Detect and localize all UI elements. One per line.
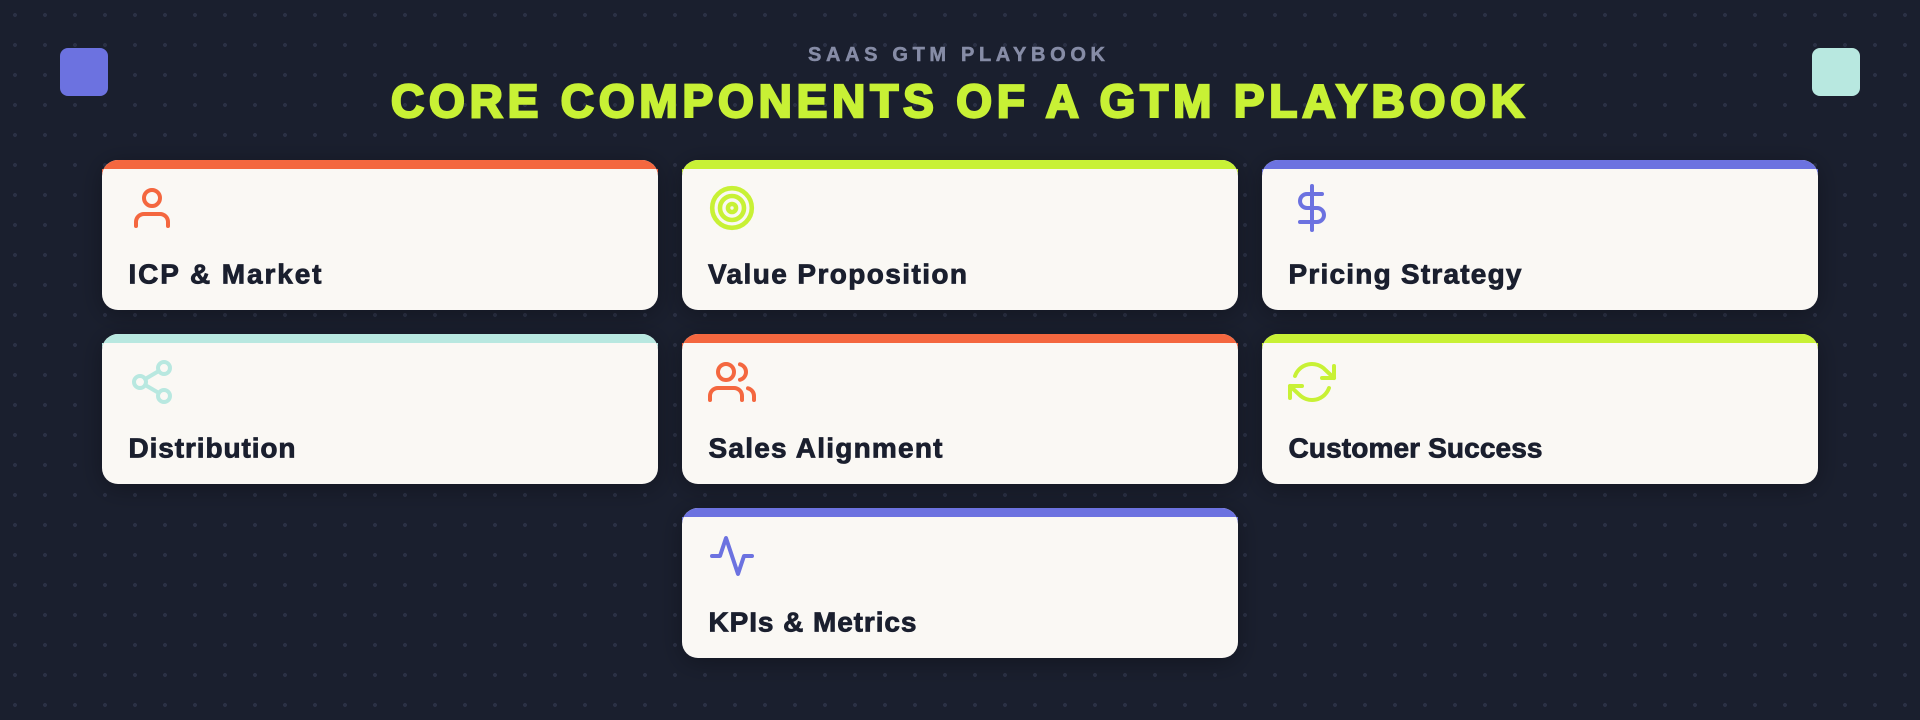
icon: share — [134, 362, 170, 402]
decorative square: purple — [60, 48, 108, 96]
icon: dollar — [1300, 186, 1324, 230]
panel: Sales Alignment — [682, 334, 1238, 484]
panel: ICP & Market — [102, 160, 658, 310]
panel: KPIs & Metrics — [682, 508, 1238, 658]
icon: person — [136, 190, 168, 226]
icon: users — [710, 364, 754, 400]
label: Sales Alignment: Sales Alignment — [708, 432, 942, 464]
panel: Distribution — [102, 334, 658, 484]
label: Customer Success: Customer Success — [1288, 432, 1542, 464]
panel: Customer Success — [1262, 334, 1818, 484]
icon: target — [712, 188, 752, 228]
icon: refresh — [1290, 364, 1334, 400]
label: Distribution: Distribution — [128, 432, 296, 464]
label: Pricing Strategy: Pricing Strategy — [1288, 258, 1522, 290]
panel: Pricing Strategy — [1262, 160, 1818, 310]
title: CORE COMPONENTS OF A GTM PLAYBOOK — [391, 75, 1524, 127]
label: Value Proposition: Value Proposition — [708, 258, 967, 290]
label: ICP & Market: ICP & Market — [128, 258, 322, 290]
panel: Value Proposition — [682, 160, 1238, 310]
subtitle: SAAS GTM PLAYBOOK — [808, 44, 1106, 66]
decorative square: mint — [1812, 48, 1860, 96]
label: KPIs & Metrics: KPIs & Metrics — [708, 606, 916, 638]
icon: activity — [712, 538, 752, 574]
